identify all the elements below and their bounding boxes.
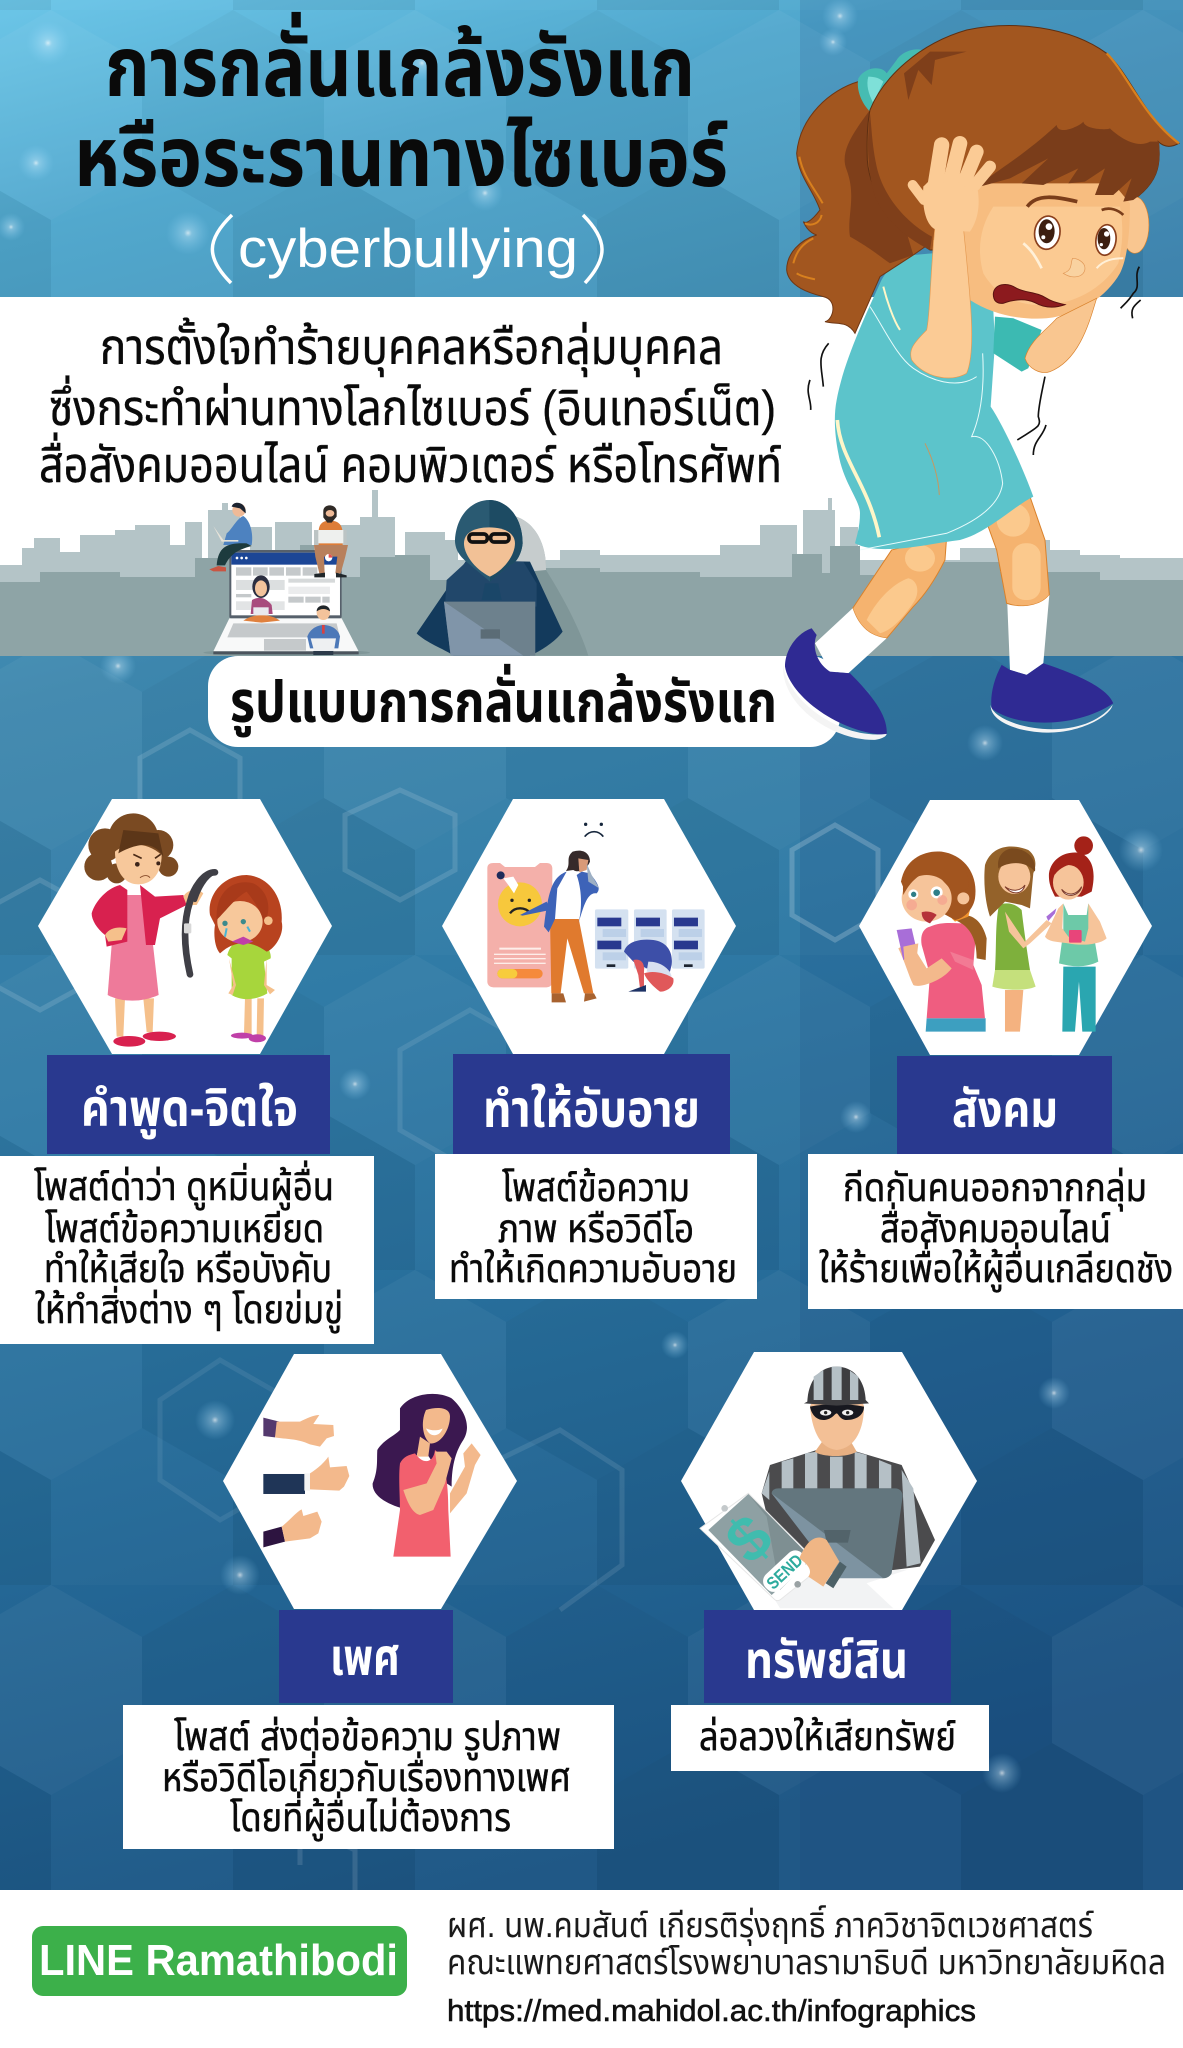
description box <box>435 1154 757 1299</box>
category label: สังคม <box>952 1081 1058 1139</box>
panel: social exclusion <box>808 800 1183 1309</box>
subtitle pill <box>208 656 840 747</box>
category label: ทรัพย์สิน <box>745 1632 908 1690</box>
title <box>74 11 728 283</box>
motion lines <box>808 267 1141 455</box>
panel: financial fraud <box>671 1352 989 1771</box>
description box <box>671 1705 989 1771</box>
fringe <box>977 122 1160 202</box>
description box: ทำให้เกิดความอับอาย <box>449 1248 737 1291</box>
hexagon with three girls illustration <box>859 800 1152 1055</box>
rear leg <box>783 537 947 740</box>
title: cyberbullying <box>238 217 578 279</box>
category label: คำพูด-จิตใจ <box>81 1080 298 1140</box>
hexagon with thief illustration <box>681 1352 977 1610</box>
dress <box>835 253 1033 550</box>
description box: โพสต์ข้อความ <box>502 1167 690 1210</box>
hair <box>867 26 1179 250</box>
ponytail <box>787 82 930 333</box>
hexagon with reaching hands and woman illustration <box>223 1354 517 1609</box>
hexagon with thief illustration: SEND <box>762 1550 807 1593</box>
category label <box>279 1610 453 1703</box>
description box: หรือวิดีโอเกี่ยวกับเรื่องทางเพศ <box>162 1751 571 1800</box>
description box: โพสต์ด่าว่า ดูหมิ่นผู้อื่น <box>34 1160 334 1210</box>
description box: ล่อลวงให้เสียทรัพย์ <box>699 1716 956 1759</box>
hexagon with mother and child illustration <box>38 799 332 1054</box>
icon: hooded hacker <box>417 500 588 656</box>
LINE Ramathibodi badge: LINE Ramathibodi <box>39 1936 398 1985</box>
category label <box>897 1056 1112 1154</box>
panel: sexual harassment <box>123 1354 614 1849</box>
description box: ให้ทำสิ่งต่าง ๆ โดยข่มขู่ <box>35 1285 343 1333</box>
LINE Ramathibodi badge <box>32 1926 407 1996</box>
description box <box>808 1154 1183 1309</box>
category label <box>453 1054 730 1154</box>
description box <box>123 1705 614 1849</box>
title: หรือระรานทางไซเบอร์ <box>74 110 728 204</box>
website URL: https://med.mahidol.ac.th/infographics <box>447 1993 976 2028</box>
description text <box>39 317 782 493</box>
category label <box>47 1055 330 1154</box>
sleeve <box>993 317 1042 372</box>
description text: การตั้งใจทำร้ายบุคคลหรือกลุ่มบุคคล <box>100 317 723 377</box>
front leg <box>984 497 1113 733</box>
icon: laptop with social media users <box>203 503 370 656</box>
illustration: scared girl covering ears <box>783 26 1179 740</box>
hexagon with thief illustration: $ <box>713 1502 786 1577</box>
description text: สื่อสังคมออนไลน์ คอมพิวเตอร์ หรือโทรศัพท์ <box>39 432 782 493</box>
face <box>932 183 1149 319</box>
description text: ซึ่งกระทำผ่านทางโลกไซเบอร์ (อินเทอร์เน็ต) <box>49 375 776 436</box>
category label: เพศ <box>330 1629 400 1687</box>
panel: verbal-emotional bullying <box>0 799 374 1344</box>
category label: ทำให้อับอาย <box>483 1081 700 1139</box>
title: การกลั่นแกล้งรังแก <box>105 11 695 114</box>
category label <box>704 1610 951 1703</box>
description box <box>0 1156 374 1344</box>
footer <box>0 1890 1183 2048</box>
description box: ทำให้เสียใจ หรือบังคับ <box>44 1248 332 1291</box>
description box: สื่อสังคมออนไลน์ <box>880 1202 1111 1251</box>
subtitle pill: รูปแบบการกลั่นแกล้งรังแก <box>230 663 777 738</box>
description box: โดยที่ผู้อื่นไม่ต้องการ <box>230 1791 511 1841</box>
credit text <box>447 1905 1166 1982</box>
credit text: ผศ. นพ.คมสันต์ เกียรติรุ่งฤทธิ์ ภาควิชาจิตเวชศาสตร์ <box>447 1905 1095 1946</box>
panel: humiliation <box>435 799 757 1299</box>
hair bow <box>858 49 922 112</box>
description box: โพสต์ข้อความเหยียด <box>45 1208 324 1251</box>
description box: กีดกันคนออกจากกลุ่ม <box>843 1167 1147 1211</box>
hexagon with sad woman and phones illustration <box>442 799 736 1054</box>
description box: โพสต์ ส่งต่อข้อความ รูปภาพ <box>174 1716 561 1760</box>
near arm and hand <box>911 143 990 378</box>
description box: ภาพ หรือวิดีโอ <box>498 1208 694 1251</box>
far arm <box>1025 298 1097 372</box>
white band with city skyline <box>0 297 1183 656</box>
